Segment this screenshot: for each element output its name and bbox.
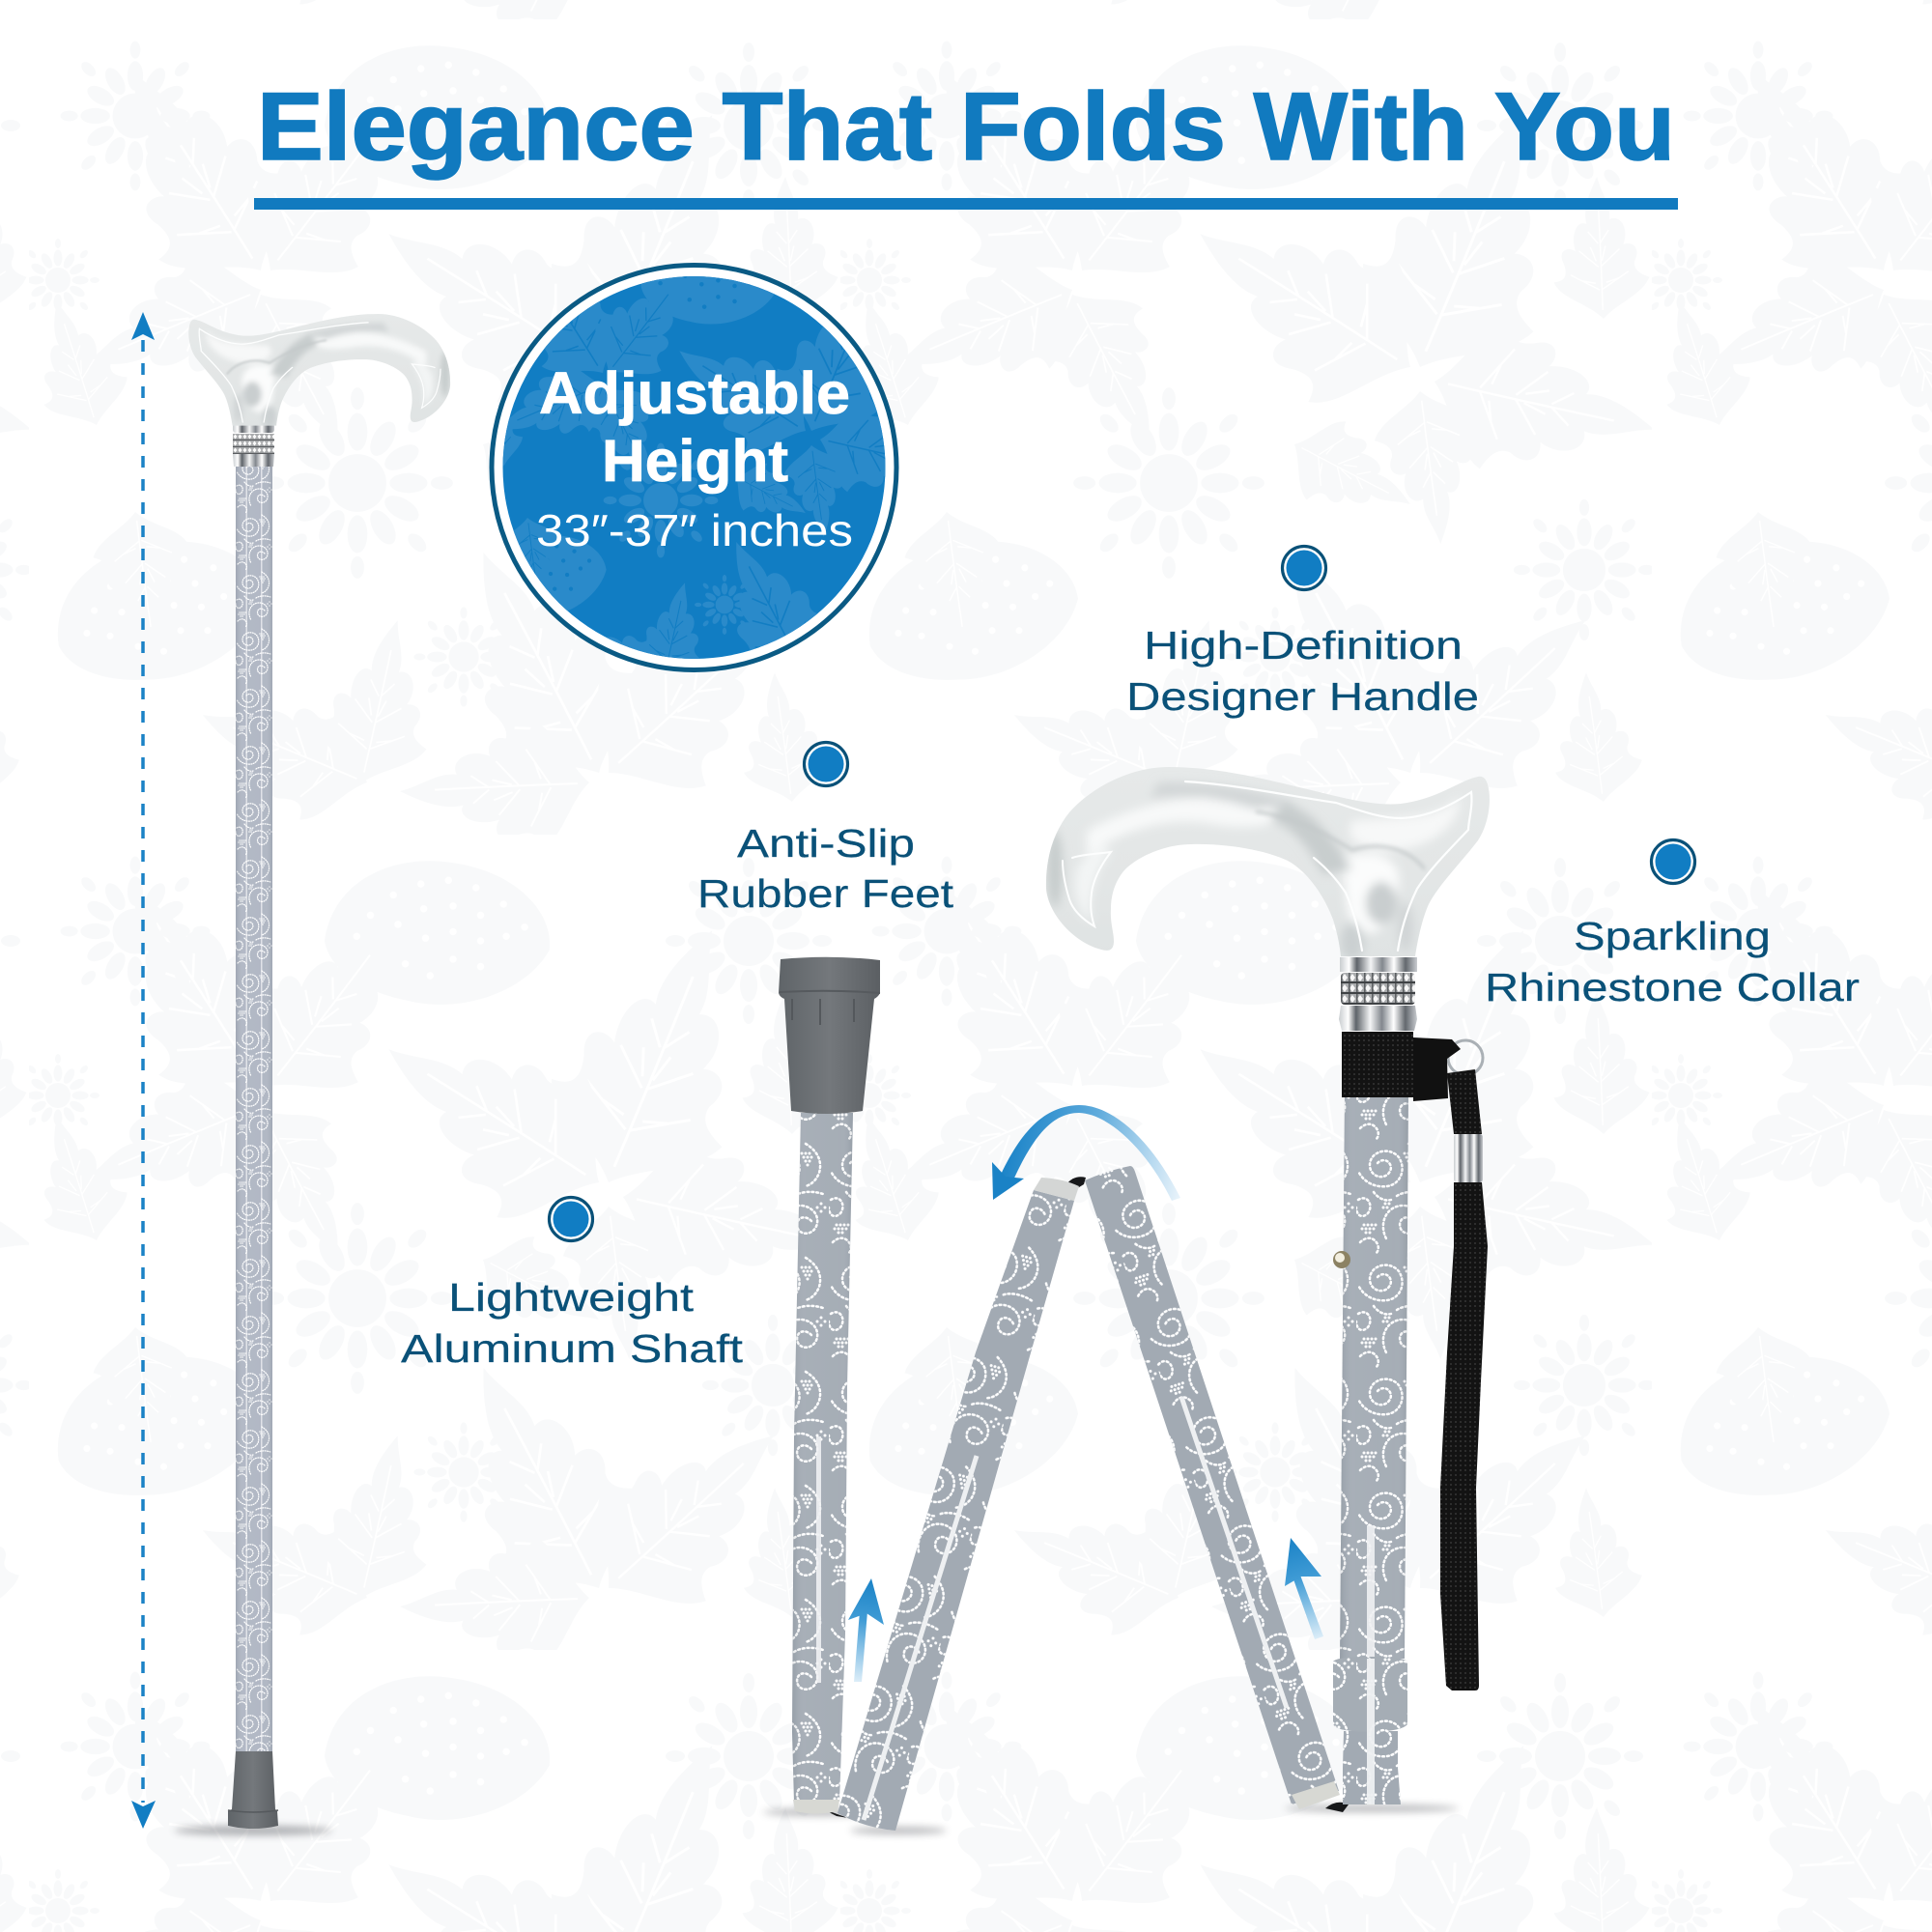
cane handle [188,314,450,429]
strap upper [1447,1069,1482,1134]
label line 1: Sparkling [1574,914,1771,958]
arrow: curved fold arrow [992,1105,1180,1201]
folded cane collar [1339,957,1417,1031]
label line 2: Rhinestone Collar [1485,965,1860,1009]
label line 2: Designer Handle [1126,674,1479,719]
callout title second line: Height [602,428,788,494]
feature: rhinestone collar [1485,840,1860,1009]
icon: bullet [549,1198,593,1240]
feature: rubber feet [697,742,954,916]
label line 1: Lightweight [448,1275,695,1320]
icon: bullet [1652,840,1694,883]
segment with rubber foot [792,1113,853,1814]
floor shadows [763,1804,1459,1834]
feature: aluminum shaft [401,1198,744,1371]
upper shaft [1340,1092,1408,1659]
icon: bullet [804,742,848,786]
label line 2: Aluminum Shaft [401,1326,744,1371]
wrist strap [1413,1037,1488,1690]
callout title: Adjustable [539,360,850,426]
height arrow: dashed double-headed [131,312,156,1829]
strap ring [1448,1040,1483,1075]
locking pin [1333,1251,1350,1268]
callout: adjustable height [492,265,896,670]
arrow: right upward [1285,1538,1323,1639]
cane shaft [236,467,272,1753]
floor shadow under cane [174,1826,332,1835]
arrow: left upward [848,1578,884,1682]
label line 2: Rubber Feet [697,871,954,916]
feature: designer handle [1126,547,1479,719]
folded cane [763,767,1490,1834]
strap lower [1440,1182,1488,1690]
cane collar [233,423,274,467]
rubber foot [779,957,880,1114]
middle right segment [1085,1166,1340,1809]
strap clasp [1454,1134,1483,1182]
title: Elegance That Folds With You [257,72,1675,180]
folded cane handle [1046,767,1490,961]
cane: full unfolded view [174,314,450,1835]
callout range: 33″-37″ inches [536,505,853,555]
label line 1: High-Definition [1144,623,1463,668]
middle left segment [838,1178,1079,1831]
lower shaft sleeve [1333,1657,1407,1804]
strap tab [1413,1037,1461,1101]
fold joints [821,1177,1349,1818]
icon: bullet [1283,547,1325,589]
black elastic band [1342,1032,1413,1097]
title underline [254,198,1678,210]
cane foot [228,1751,278,1829]
label line 1: Anti-Slip [737,821,915,866]
